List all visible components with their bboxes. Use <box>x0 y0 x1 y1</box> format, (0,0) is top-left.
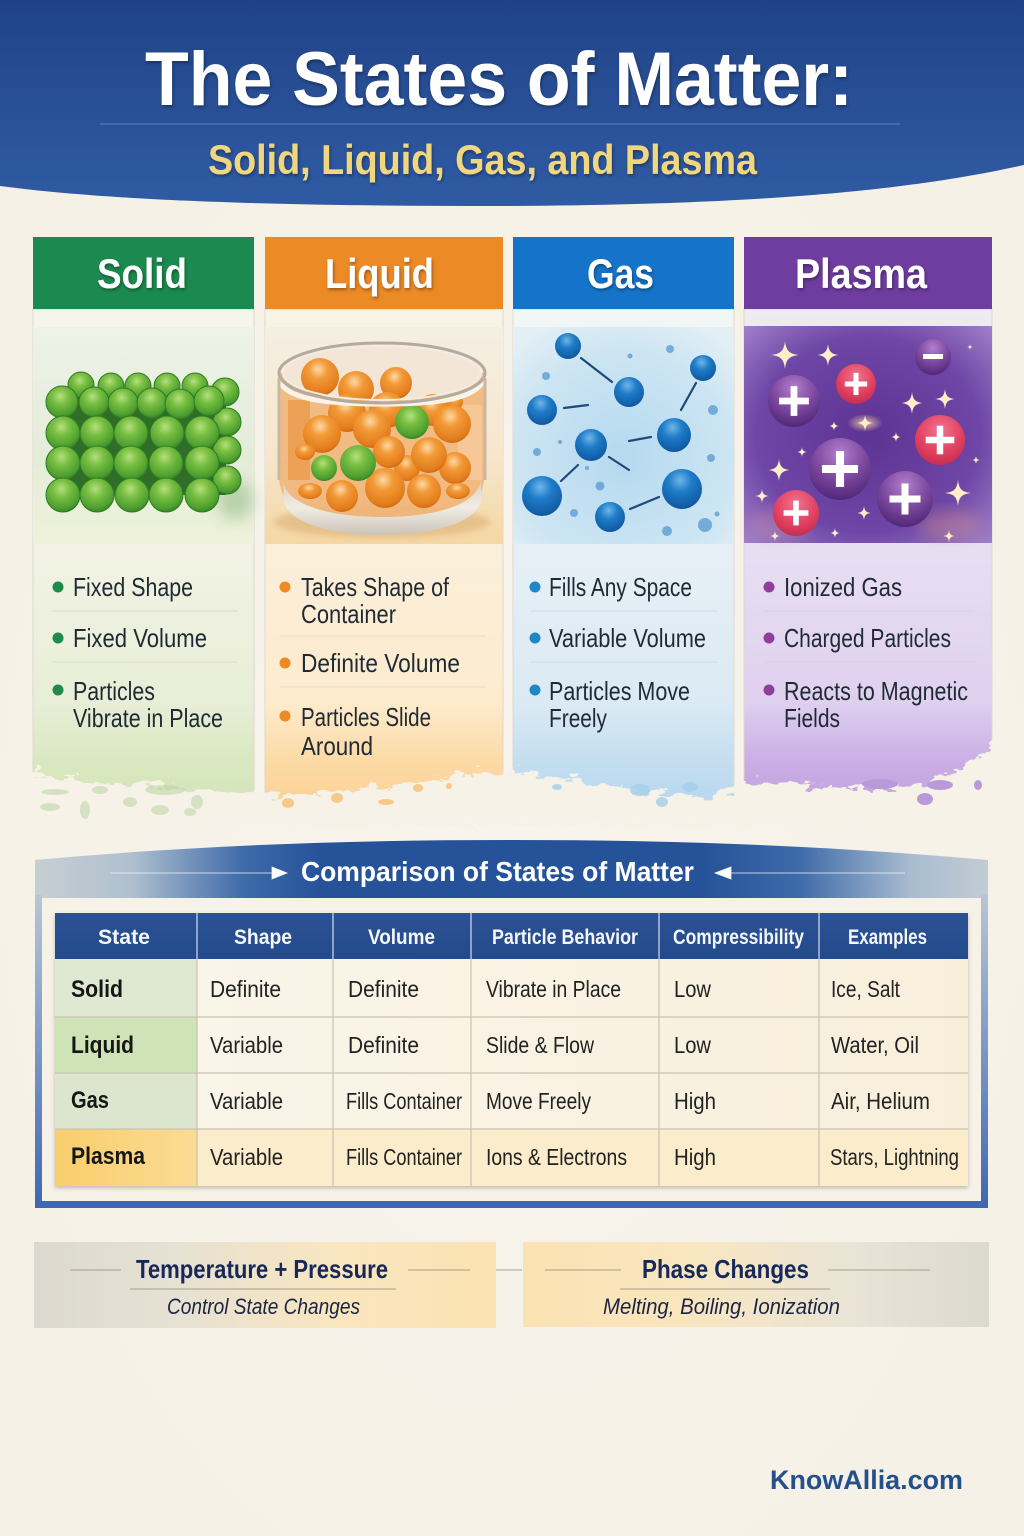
panel: plasma <box>744 237 992 800</box>
table row: liquid: Liquid <box>71 1032 134 1059</box>
callout: phase changes <box>523 1242 989 1327</box>
callout: temperature and pressure: Control State Changes <box>167 1294 360 1319</box>
table row: solid: Vibrate in Place <box>486 976 621 1002</box>
panel: comparison table <box>35 840 988 1208</box>
table header row: State <box>98 926 150 949</box>
panel: gas <box>513 237 734 800</box>
bullet list: liquid: Particles Slide <box>301 702 431 732</box>
bullet list: liquid <box>280 572 486 761</box>
table row: gas: Air, Helium <box>831 1088 930 1114</box>
table header row: Volume <box>368 926 435 949</box>
illustration: plasma ions and sparks <box>744 326 992 543</box>
bullet list: liquid: Takes Shape of <box>301 572 450 602</box>
table row: gas: Fills Container <box>346 1088 462 1114</box>
panel: solid <box>33 237 254 800</box>
illustration: gas particles <box>513 327 734 544</box>
table row: solid: Definite <box>210 976 281 1002</box>
bullet list: plasma <box>764 572 974 733</box>
heading: plasma: Plasma <box>795 250 928 297</box>
bullet list: plasma: Fields <box>784 703 840 733</box>
paint wash covering column bottoms <box>0 738 1024 826</box>
heading: gas: Gas <box>587 250 654 297</box>
table header row <box>98 926 927 949</box>
table header row: Particle Behavior <box>492 926 638 949</box>
table row: plasma <box>71 1143 959 1170</box>
bullet list: plasma: Charged Particles <box>784 623 951 653</box>
table row: gas: Move Freely <box>486 1088 591 1114</box>
table row: plasma: Ions & Electrons <box>486 1144 627 1170</box>
table row: gas: Variable <box>210 1088 283 1114</box>
bullet list: gas: Fills Any Space <box>549 572 692 602</box>
table row: solid: Ice, Salt <box>831 976 900 1002</box>
bullet list: liquid: Container <box>301 599 396 629</box>
callout: phase changes: Phase Changes <box>642 1254 809 1284</box>
bullet list: solid <box>52 572 238 733</box>
brand: KnowAllia.com: KnowAllia.com <box>770 1465 963 1495</box>
table row: gas: Gas <box>71 1087 109 1114</box>
bullet list: solid: Vibrate in Place <box>73 703 223 733</box>
bullet list: gas: Variable Volume <box>549 623 706 653</box>
arrow: left decorative <box>110 867 287 879</box>
bullet list: gas: Freely <box>549 703 607 733</box>
table row: solid: Definite <box>348 976 419 1002</box>
bullet list: solid: Particles <box>73 676 155 706</box>
table row: liquid: Slide & Flow <box>486 1032 594 1058</box>
comparison heading: Comparison of States of Matter <box>301 856 694 887</box>
heading: liquid: Liquid <box>325 250 434 297</box>
table row: plasma: Variable <box>210 1144 283 1170</box>
table row: liquid: Variable <box>210 1032 283 1058</box>
arrow: right decorative <box>715 867 905 879</box>
bullet list: liquid: Definite Volume <box>301 648 460 678</box>
bullet list: liquid: Around <box>301 731 373 761</box>
bullet list: gas <box>530 572 718 733</box>
table row: plasma: High <box>674 1144 716 1170</box>
table row: gas <box>71 1087 930 1114</box>
panel: liquid <box>265 237 503 800</box>
illustration: glass with liquid particles <box>265 327 503 544</box>
bullet list: plasma: Ionized Gas <box>784 572 902 602</box>
title: The States of Matter: <box>145 37 853 122</box>
table header row: Examples <box>848 926 927 949</box>
table <box>55 913 968 1186</box>
table row: liquid: Definite <box>348 1032 419 1058</box>
table header row: Compressibility <box>673 926 804 949</box>
table row: plasma: Stars, Lightning <box>830 1144 959 1170</box>
subtitle: Solid, Liquid, Gas, and Plasma <box>208 136 758 183</box>
table row: liquid: Low <box>674 1032 711 1058</box>
bullet list: gas: Particles Move <box>549 676 690 706</box>
illustration: solid particle lattice <box>33 327 254 543</box>
table row: plasma: Fills Container <box>346 1144 462 1170</box>
table row: liquid <box>71 1032 919 1059</box>
table row: plasma: Plasma <box>71 1143 146 1170</box>
table header row: Shape <box>234 926 292 949</box>
callout: phase changes: Melting, Boiling, Ionization <box>603 1294 840 1319</box>
bullet list: solid: Fixed Shape <box>73 572 193 602</box>
table row: gas: High <box>674 1088 716 1114</box>
table row: solid: Low <box>674 976 711 1002</box>
title banner <box>0 0 1024 206</box>
table row: solid <box>71 976 900 1003</box>
table row: liquid: Water, Oil <box>831 1032 919 1058</box>
table row: solid: Solid <box>71 976 123 1003</box>
heading: solid: Solid <box>97 250 187 297</box>
bullet list: plasma: Reacts to Magnetic <box>784 676 968 706</box>
callout: temperature and pressure: Temperature + Pressure <box>136 1254 388 1284</box>
bullet list: solid: Fixed Volume <box>73 623 207 653</box>
callout: temperature and pressure <box>34 1242 522 1328</box>
